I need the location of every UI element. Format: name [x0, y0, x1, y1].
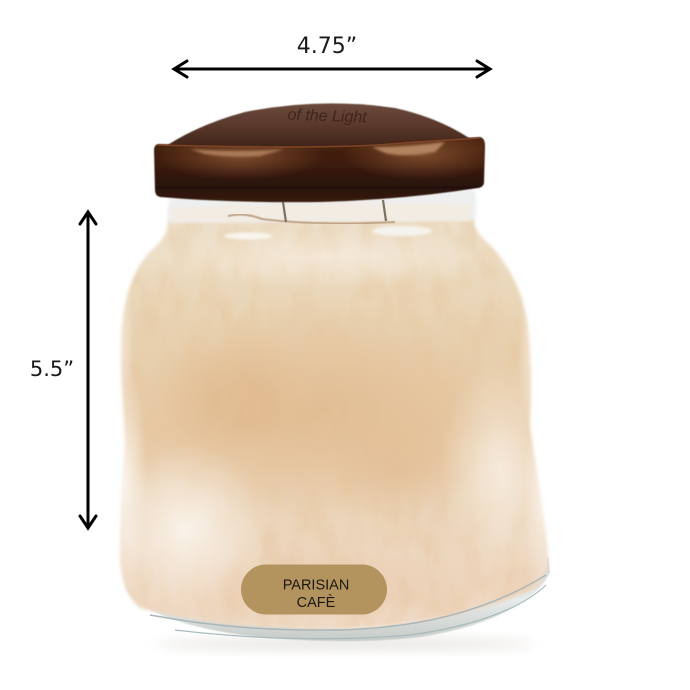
embossed lid text: of the Light: [287, 107, 368, 126]
floor shadow: [155, 639, 535, 649]
product label: [241, 564, 387, 614]
wax body: [118, 218, 550, 630]
lid rim: [153, 136, 486, 203]
glass base: [124, 556, 550, 641]
shoulder reflections: [224, 232, 272, 240]
product label: PARISIAN: [283, 578, 349, 594]
glass base rings: [150, 575, 546, 639]
product label: CAFÈ: [297, 594, 336, 611]
height arrow: [80, 212, 96, 528]
wax top inside neck: [172, 203, 470, 222]
height label: 5.5”: [30, 357, 74, 381]
width arrow: [174, 61, 490, 77]
glass jar neck: [167, 190, 476, 226]
wax mottling: [120, 220, 548, 628]
jar candle photo: [100, 103, 567, 649]
wicks: [283, 200, 386, 222]
width label: 4.75”: [297, 34, 357, 59]
wax top line: [228, 215, 395, 223]
lid dome: [166, 103, 472, 152]
